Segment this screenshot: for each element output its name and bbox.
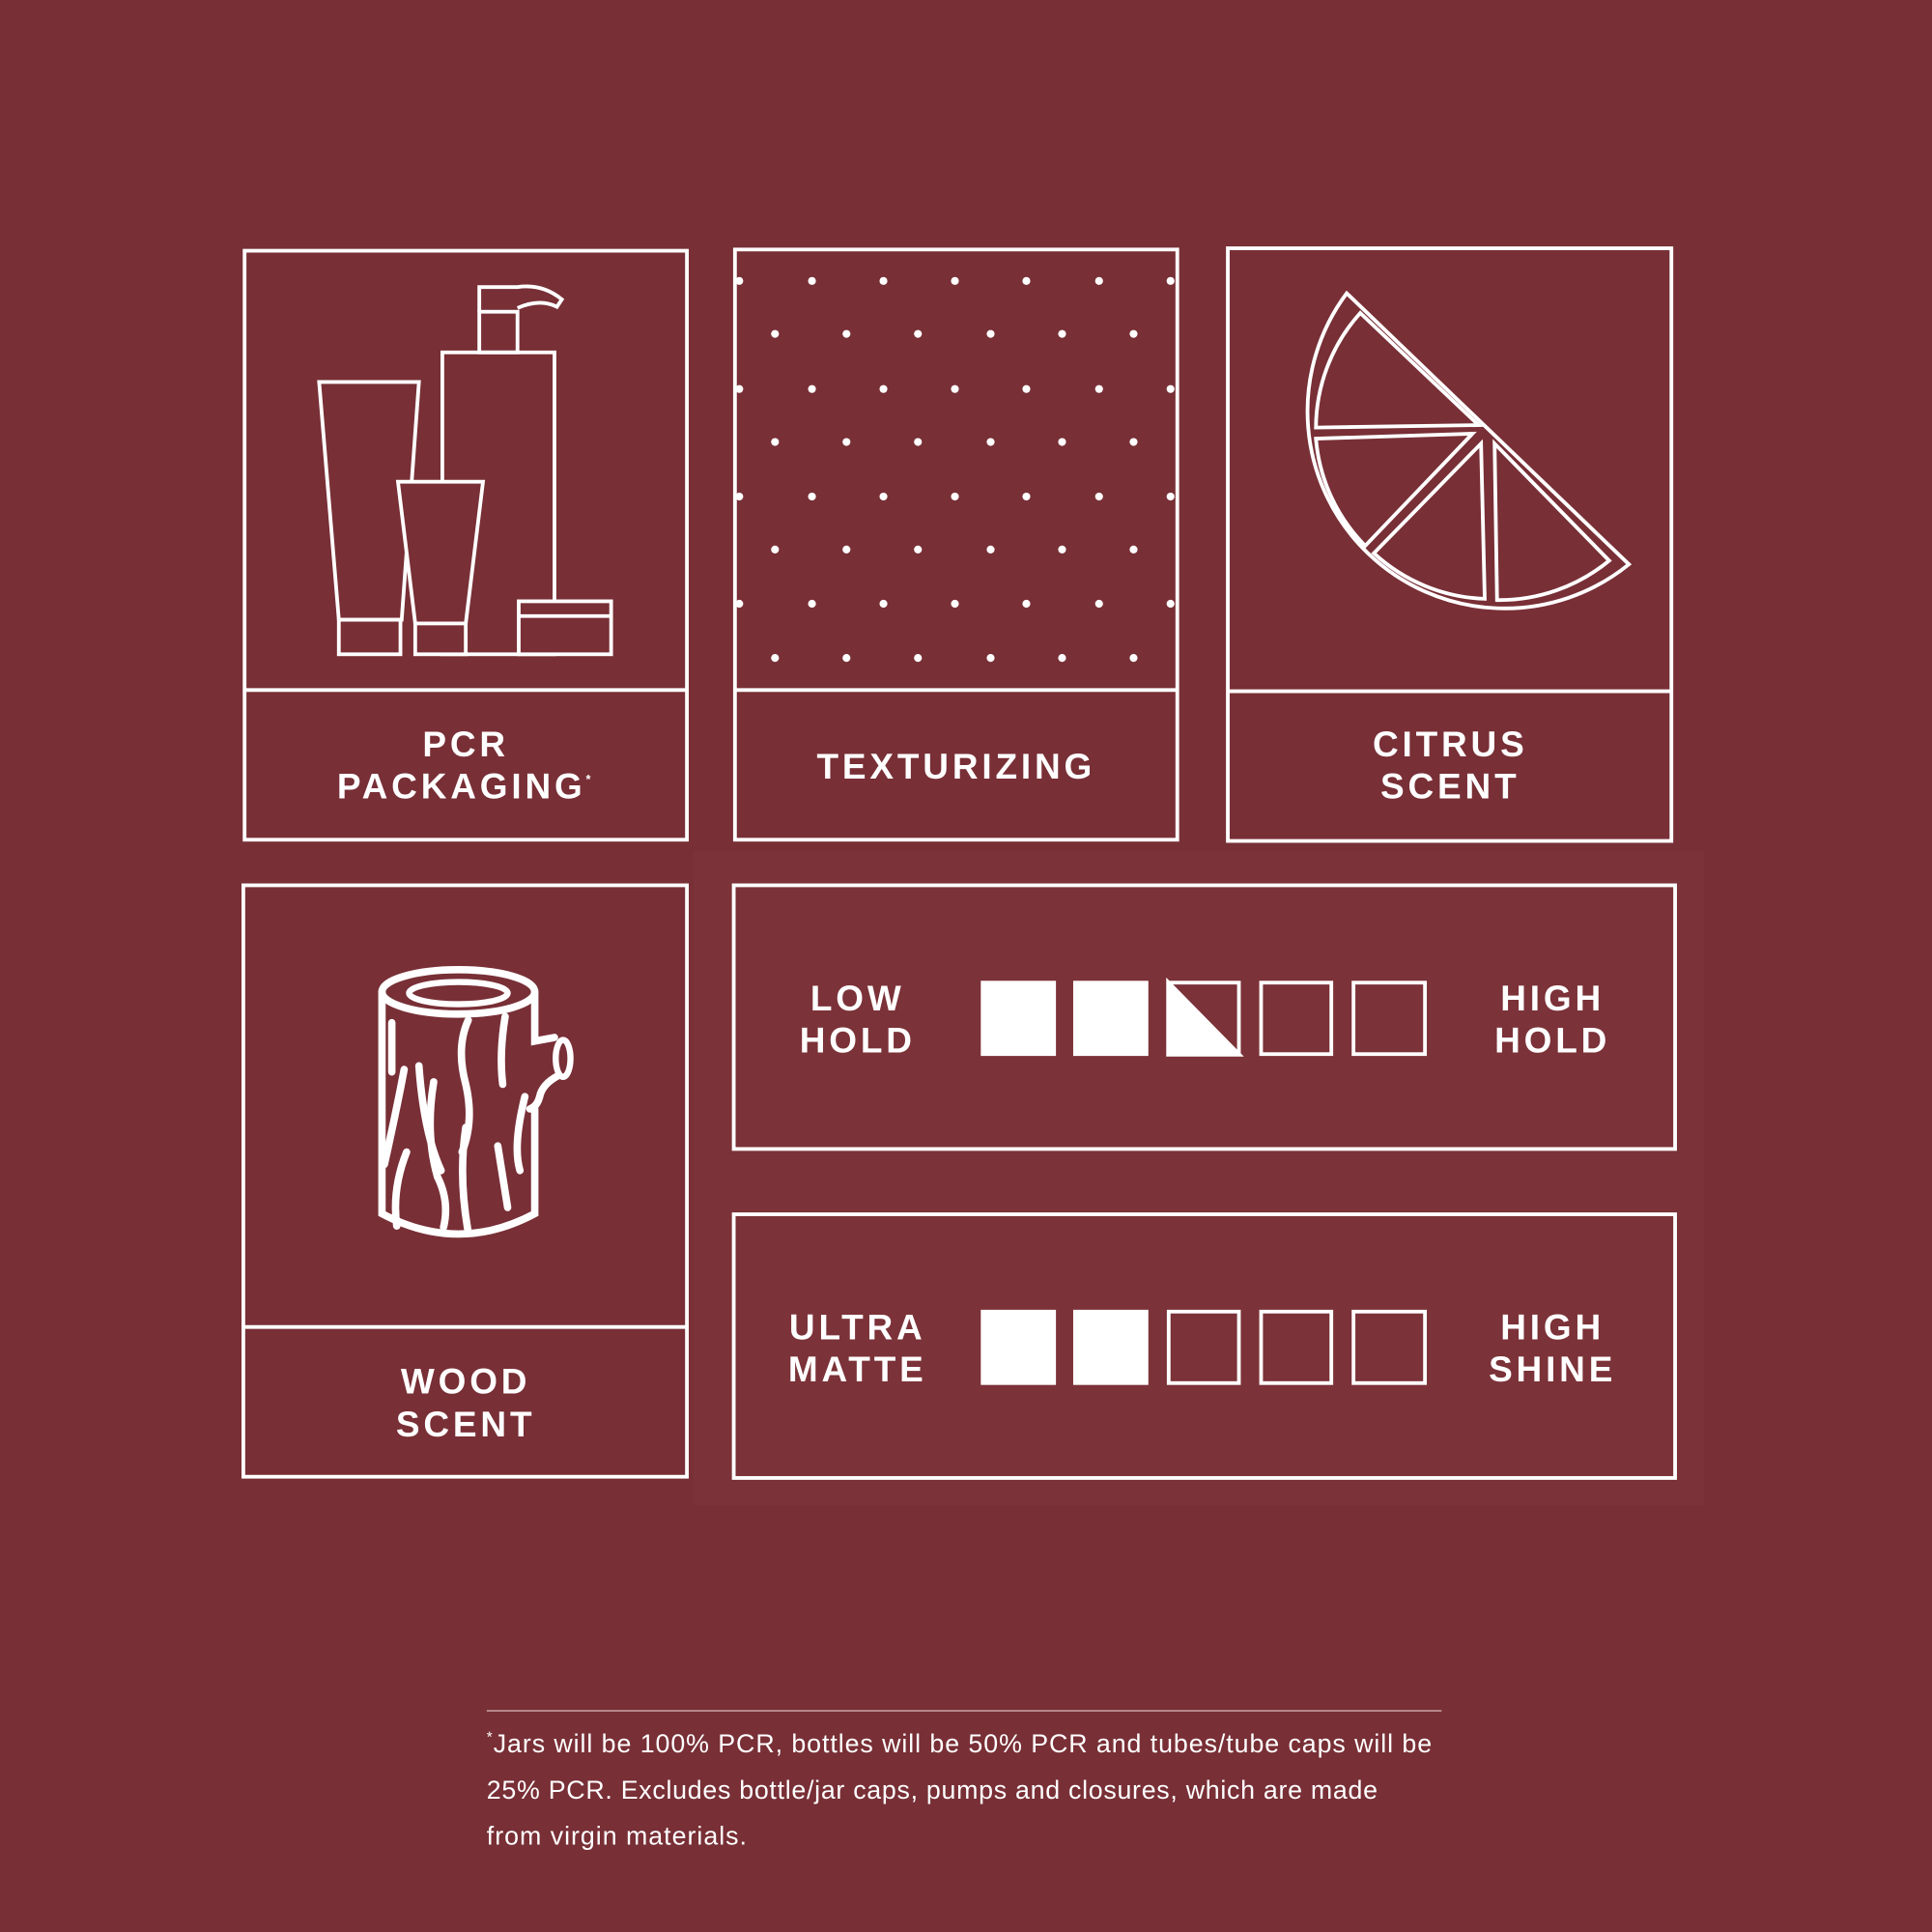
panel: hold scale <box>734 885 1675 1149</box>
panel: citrus scent <box>1227 248 1672 841</box>
panel: PCR packaging <box>244 251 687 839</box>
label: ultra matte: ULTRA <box>789 1307 926 1347</box>
shine squares <box>982 1312 1425 1383</box>
panel: shine scale <box>734 1214 1675 1478</box>
hold squares <box>982 982 1425 1055</box>
panel: PCR packaging: PACKAGING <box>337 767 586 807</box>
label: texturizing: TEXTURIZING <box>817 747 1095 786</box>
panel: wood scent: SCENT <box>396 1405 535 1444</box>
panel: texturizing <box>734 249 1178 839</box>
label: high hold: HIGH <box>1500 979 1605 1018</box>
label: PCR packaging: PCR <box>422 724 509 764</box>
panel: wood scent <box>242 885 688 1477</box>
footnote: * <box>487 1730 493 1747</box>
footnote: 25% PCR. Excludes bottle/jar caps, pumps and closures, which are made <box>487 1776 1378 1804</box>
label: citrus scent: CITRUS <box>1373 724 1528 764</box>
panel: citrus scent: SCENT <box>1380 767 1520 807</box>
label: high shine: HIGH <box>1500 1307 1605 1347</box>
panel: shine scale: MATTE <box>788 1350 927 1389</box>
footnote: from virgin materials. <box>487 1821 747 1850</box>
icon: bottles <box>319 286 611 654</box>
icon: log <box>382 970 571 1234</box>
label: wood scent: WOOD <box>401 1362 530 1402</box>
panel: PCR packaging: * <box>586 772 594 786</box>
icon: citrus slice <box>1308 294 1629 609</box>
footnote: Jars will be 100% PCR, bottles will be 50% PCR and tubes/tube caps will be <box>494 1729 1432 1758</box>
label: low hold: LOW <box>810 979 905 1018</box>
panel: shine scale: SHINE <box>1489 1350 1616 1389</box>
footnote <box>487 1729 1432 1850</box>
backdrop: scales <box>694 850 1704 1506</box>
panel: hold scale: HOLD <box>1494 1020 1610 1060</box>
panel: hold scale: HOLD <box>800 1020 916 1060</box>
icon: dot pattern <box>735 277 1175 662</box>
